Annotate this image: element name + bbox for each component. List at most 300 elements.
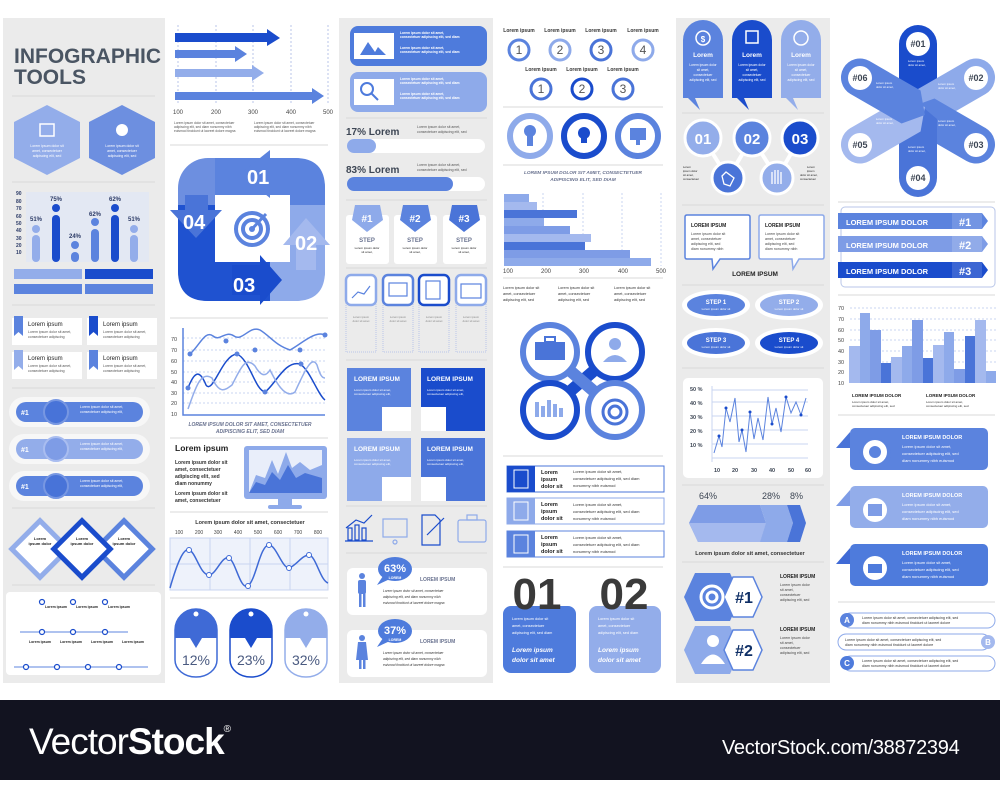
prism percentages: 8% [790,491,803,501]
ABC list: B [985,638,991,647]
monitor text block: adipiscing elit, sed [175,474,220,480]
cycle diagram: 03 [233,275,255,297]
arrow chart: Lorem ipsum dolor sit amet, consectetuer [174,121,235,125]
speech boxes: amet, consectetuer [765,237,796,241]
arrow chart: 200 [211,110,222,116]
bar chart col1: 90 [16,191,22,197]
flower diagram: Lorem ipsum [908,59,925,63]
zigzag line chart: 50 [788,468,794,474]
ABC list: diam nonummy nibh euismod tincidunt ut laoreet dolore [862,664,950,668]
hexagon cards: Lorem ipsum dolor sit [105,144,139,148]
flower diagram: Lorem ipsum [938,119,955,123]
bookmark list: Lorem ipsum [28,356,63,362]
speech boxes: adipiscing elit, sed [691,242,720,246]
timeline: Lorem ipsum [29,640,51,644]
01 02 cards: adipiscing elit, sed diam [598,631,638,635]
01 02 cards: amet, consectetuer [512,624,545,628]
list rows col4: consectetuer adipiscing elit, sed diam [573,476,640,481]
monitor text block: Lorem ipsum dolor sit [175,491,228,497]
flower diagram: Lorem ipsum [876,117,893,121]
speech tags col5: consectetuer [743,73,762,77]
pill list: consectetuer adipiscing elit, [80,410,123,414]
diamonds: ipsum dolor [71,541,94,546]
list rows col4: Lorem [541,502,558,508]
timeline: Lorem ipsum [45,605,67,609]
step cards: #2 [409,214,421,225]
bookmark list: consectetuer adipiscing [103,369,140,373]
banners col3: consectetuer adipiscing elit, sed diam [400,35,460,39]
zigzag line chart: 60 [805,468,811,474]
tab cards: diam nonummy nibh euismod [902,516,954,521]
speech boxes: diam nonummy nibh [691,247,723,251]
hexagon badges: #1 [735,590,753,607]
bookmark list: consectetuer adipiscing [103,335,140,339]
speech boxes: LOREM IPSUM [765,223,800,229]
ABC list: A [844,616,850,625]
numbered circles col4: 1 [516,43,523,57]
tab cards: LOREM IPSUM DOLOR [902,435,962,441]
ribbon list: #2 [959,240,971,252]
prism percentages: Lorem ipsum dolor sit amet, consectetuer [695,551,806,557]
speech tags col5: Lorem ipsum dolor [787,63,816,67]
column chart col6: 70 [838,306,844,312]
bar chart col1: 20 [16,243,22,249]
zigzag line chart: 40 % [690,401,703,407]
zigzag line chart: 10 [714,468,720,474]
bookmark list: Lorem ipsum dolor sit amet, [28,330,71,334]
flower diagram: #02 [968,73,984,83]
01 02 cards: Lorem ipsum [598,647,639,654]
hexagon badges: LOREM IPSUM [780,574,815,580]
icon cards: dolor sit amet [426,319,443,323]
ABC list: diam nonummy nibh euismod tincidunt ut laoreet dolore [845,643,933,647]
people percentage cards: Lorem ipsum dolor sit amet, consectetuer [383,589,444,593]
horizontal bar chart col4: 100 [503,269,514,275]
wave chart: 300 [214,530,222,536]
speech tags col5: adipiscing elit, sed [739,78,766,82]
bookmark list: consectetuer adipiscing [28,335,65,339]
speech tags col5: Lorem [791,52,811,59]
monitor text block [175,443,327,509]
pill list: consectetuer adipiscing elit, [80,484,123,488]
diamonds [12,521,152,577]
diamonds: Lorem [76,536,89,541]
ribbon list: LOREM IPSUM DOLOR [846,267,929,276]
four squares: consectetuer adipiscing elit, [354,392,391,396]
line chart col2 [171,328,328,435]
bar chart col1: 10 [16,250,22,256]
list rows col4: consectetuer adipiscing elit, sed diam [573,509,640,514]
column chart col6: 10 [838,381,844,387]
speech boxes: amet, consectetuer [691,237,722,241]
speech tags col5: sit amet, [795,68,807,72]
column chart col6: consectetuer adipiscing elit, sed [852,404,895,408]
banners col3: Lorem ipsum dolor sit amet, [400,31,444,35]
tab cards: diam nonummy nibh euismod [902,458,954,463]
hexagon cards: adipiscing elit, sed [108,154,136,158]
flower diagram [834,25,1000,197]
ribbon list: LOREM IPSUM DOLOR [846,241,929,250]
progress bars [346,125,485,191]
hexagon cards: adipiscing elit, sed [33,154,61,158]
arrow chart [173,25,334,133]
list rows col4: ipsum [541,477,557,483]
01 02 cards: 01 [513,570,561,619]
numbered circles with hands: ipsum [807,169,815,173]
footer bar: ® [224,724,232,735]
tab cards: Lorem ipsum dolor sit amet, [902,502,951,507]
footer bar: VectorStock.com/38872394 [722,737,960,759]
bookmark list: Lorem ipsum dolor sit amet, [103,330,146,334]
numbered circles col4: 2 [579,82,586,96]
line chart col2: 60 [171,359,177,365]
hexagon badges: adipiscing elit, sed [780,598,809,602]
list rows col4: dolor sit [541,516,563,522]
people percentage cards: 37% [384,625,406,637]
arrow chart: 500 [323,110,334,116]
wave chart: 800 [314,530,322,536]
zigzag line chart: 20 % [690,429,703,435]
line chart col2: 10 [171,412,177,418]
step cards: sit amet, [409,250,421,254]
ribbon list [838,207,995,287]
title: INFOGRAPHIC [14,45,161,68]
four squares: LOREM IPSUM [427,446,473,453]
hexagon badges: LOREM IPSUM [780,627,815,633]
tab cards: consectetuer adipiscing elit, sed [902,567,959,572]
percentage drops: 12% [182,652,210,668]
list rows col4: nonummy nibh euismod [573,483,615,488]
tab cards: LOREM IPSUM DOLOR [902,551,962,557]
hexagon badges: consectetuer [780,646,801,650]
percentage drops: 23% [237,652,265,668]
hexagon badges: Lorem ipsum dolor [780,583,811,587]
percentage drops: 32% [292,652,320,668]
flower diagram: Lorem ipsum [908,145,925,149]
list rows col4: nonummy nibh euismod [573,516,615,521]
bar chart col1: 30 [16,236,22,242]
tab cards: consectetuer adipiscing elit, sed [902,509,959,514]
banners col3: Lorem ipsum dolor sit amet, [400,46,444,50]
horizontal bar chart col4: Lorem ipsum dolor sit [558,286,595,290]
speech boxes: LOREM IPSUM [691,223,726,229]
ABC list: Lorem ipsum dolor sit amet, consectetuer adipiscing elit, sed [862,616,958,620]
column chart col6: Lorem ipsum dolor sit amet, [852,400,889,404]
step ellipses: STEP 3 [706,338,727,344]
column chart col6: 60 [838,328,844,334]
icon cards: Lorem ipsum [353,315,370,319]
zigzag line chart: 50 % [690,387,703,393]
icon cards: Lorem ipsum [390,315,407,319]
01 02 cards: Lorem ipsum dolor sit [512,617,549,621]
list rows col4: Lorem [541,470,558,476]
bookmark list [12,316,157,379]
people percentage cards: LOREM [389,638,401,642]
horizontal bar chart col4: amet, consectetuer [614,292,647,296]
pill list: #1 [21,484,29,491]
banners col3: consectetuer adipiscing elit, sed diam [400,81,460,85]
ABC list [838,613,995,671]
list rows col4: Lorem ipsum dolor sit amet, [573,469,622,474]
footer bar: VectorStock [29,721,224,762]
hexagon badges [684,573,815,674]
flower diagram: dolor sit amet, [908,149,926,153]
zigzag line chart [683,378,823,478]
horizontal bar chart col4: 400 [618,269,629,275]
line chart col2: 70 [171,348,177,354]
arrow chart: euismod tincidunt ut laoreet dolore magna [174,129,236,133]
numbered circles col4: Lorem ipsum [566,67,598,73]
line chart col2: ADIPISCING ELIT, SED DIAM [215,429,285,435]
speech boxes: diam nonummy nibh [765,247,797,251]
column chart col6: 70 [838,317,844,323]
numbered circles col4: Lorem ipsum [607,67,639,73]
numbered circles col4: 4 [640,43,647,57]
line chart col2: LOREM IPSUM DOLOR SIT AMET, CONSECTETUER [188,422,312,428]
panel backgrounds [3,18,830,683]
horizontal bar chart col4: 500 [656,269,667,275]
arrow chart: euismod tincidunt ut laoreet dolore magna [254,129,316,133]
wave chart: 100 [175,530,183,536]
bookmark list: Lorem ipsum [28,322,63,328]
column chart col6: Lorem ipsum dolor sit amet, [926,400,963,404]
numbered circles col4: 1 [538,82,545,96]
ABC list: Lorem ipsum dolor sit amet, consectetuer adipiscing elit, sed [845,638,941,642]
people percentage cards: adipiscing elit, sed diam nonummy nibh [383,595,441,599]
icon cards: Lorem ipsum [463,315,480,319]
progress bars: consectetuer adipiscing elit, sed [417,130,467,134]
bar chart col1: 50 [16,221,22,227]
timeline [6,592,161,675]
column chart col6: 50 [838,338,844,344]
wave chart: 600 [274,530,282,536]
flower diagram: dolor sit amet, [876,121,894,125]
list rows col4: dolor sit [541,484,563,490]
numbered circles with hands: sit amet, [683,173,694,177]
speech boxes: adipiscing elit, sed [765,242,794,246]
step ellipses: Lorem ipsum dolor sit [702,345,730,349]
speech tags col5: consectetuer [792,73,811,77]
zigzag line chart: 30 % [690,415,703,421]
progress bars: 17% Lorem [346,127,399,138]
speech tags col5: sit amet, [746,68,758,72]
column chart col6: LOREM IPSUM DOLOR [926,393,976,398]
column chart col6: 20 [838,370,844,376]
people percentage cards: LOREM [389,576,401,580]
speech tags col5: Lorem ipsum dolor [738,63,767,67]
flower diagram: #04 [910,173,926,183]
wave chart: Lorem ipsum dolor sit amet, consectetuer [195,520,306,526]
four squares: consectetuer adipiscing elit, [427,392,464,396]
list rows col4: dolor sit [541,549,563,555]
four squares: Lorem ipsum dolor sit amet, [427,388,464,392]
speech tags col5: Lorem ipsum dolor [689,63,718,67]
diamonds: ipsum dolor [29,541,52,546]
tab cards: Lorem ipsum dolor sit amet, [902,444,951,449]
timeline: Lorem ipsum [122,640,144,644]
people percentage cards: LOREM IPSUM [420,577,455,583]
ribbon list: #1 [959,217,971,229]
people percentage cards [347,557,487,677]
list rows col4: Lorem ipsum dolor sit amet, [573,535,622,540]
bar chart col1: 24% [69,234,82,240]
speech tags col5: adipiscing elit, sed [690,78,717,82]
list rows col4: consectetuer adipiscing elit, sed diam [573,542,640,547]
step ellipses: Lorem ipsum dolor sit [702,307,730,311]
column chart col6: 30 [838,360,844,366]
percentage drops [175,609,327,677]
bookmark list: Lorem ipsum dolor sit amet, [28,364,71,368]
arrow chart: 400 [286,110,297,116]
tab cards: LOREM IPSUM DOLOR [902,493,962,499]
hexagon badges: #2 [735,643,753,660]
wave chart: 500 [254,530,262,536]
icon cards: dolor sit amet [463,319,480,323]
bar chart col1: 75% [50,197,63,203]
step cards: Lorem ipsum dolor [452,246,476,250]
monitor text block: Lorem ipsum [175,443,229,453]
column chart col6 [838,306,997,408]
bar chart col1: 40 [16,228,22,234]
banners col3 [350,26,487,112]
zigzag line chart: 20 [732,468,738,474]
icon cards: dolor sit amet [390,319,407,323]
icon cards [346,275,486,352]
flower diagram: #01 [910,39,926,49]
line chart col2: 30 [171,391,177,397]
bar chart col1: 62% [109,197,122,203]
outline icons row [345,515,486,545]
horizontal bar chart col4: 300 [579,269,590,275]
icon cards: dolor sit amet [353,319,370,323]
hexagon cards [14,105,155,175]
step cards: STEP [359,238,375,244]
pill list: #1 [21,410,29,417]
bar chart col1: 70 [16,206,22,212]
flower diagram: #06 [852,73,868,83]
speech boxes [685,215,824,278]
pill list: #1 [21,447,29,454]
four squares: Lorem ipsum dolor sit amet, [427,458,464,462]
pill list: consectetuer adipiscing elit, [80,447,123,451]
01 02 cards [503,570,661,673]
ABC list: diam nonummy nibh euismod tincidunt ut laoreet dolore [862,621,950,625]
monitor text block: amet, consectetuer [175,467,221,473]
progress bars: consectetuer adipiscing elit, sed [417,168,467,172]
arrow chart: adipiscing elit, sed diam nonummy nibh [174,125,232,129]
bookmark list: consectetuer adipiscing [28,369,65,373]
hexagon cards: amet, consectetuer [32,149,63,153]
bar chart col1: 51% [30,217,43,223]
numbered circles with hands: dolor sit amet, [800,173,818,177]
flower diagram: #03 [968,140,984,150]
monitor text block: Lorem ipsum dolor sit [175,460,228,466]
cycle diagram: 04 [183,212,206,234]
title: TOOLS [14,66,86,89]
list rows col4: ipsum [541,509,557,515]
banners col3: Lorem ipsum dolor sit amet, [400,77,444,81]
hexagon badges: consectetuer [780,593,801,597]
01 02 cards: Lorem ipsum [512,647,553,654]
banners col3: consectetuer adipiscing elit, sed diam [400,96,460,100]
speech tags col5: consectetuer [694,73,713,77]
hexagon cards: Lorem ipsum dolor sit [30,144,64,148]
hexagon cards: amet, consectetuer [107,149,138,153]
bar chart col1: 51% [128,217,141,223]
horizontal bar chart col4 [503,193,667,302]
flower diagram: Lorem ipsum [938,82,955,86]
ABC list: C [844,659,850,668]
speech tags col5 [683,20,821,110]
numbered circles col4: Lorem ipsum [525,67,557,73]
ABC list: Lorem ipsum dolor sit amet, consectetuer adipiscing elit, sed [862,659,958,663]
speech tags col5: Lorem [742,52,762,59]
pill list: Lorem ipsum dolor sit amet, [80,479,123,483]
hexagon badges: adipiscing elit, sed [780,651,809,655]
banners col3: Lorem ipsum dolor sit amet, [400,92,444,96]
step cards [346,205,486,264]
numbered circles with hands [683,120,818,194]
numbered circles with hands: 01 [695,131,711,148]
flower diagram: dolor sit amet, [876,85,894,89]
wave chart: 700 [294,530,302,536]
numbered circles col4: Lorem ipsum [544,28,576,34]
flower diagram: dolor sit amet, [938,123,956,127]
numbered circles with hands: consectetuer [800,177,816,181]
timeline: Lorem ipsum [76,605,98,609]
line chart col2: 70 [171,337,177,343]
title [14,45,161,89]
bookmark list: Lorem ipsum dolor sit amet, [103,364,146,368]
step cards: STEP [407,238,423,244]
progress bars: Lorem ipsum dolor sit amet, [417,125,460,129]
numbered circles col4 [503,28,659,99]
bar chart col1: 62% [89,212,102,218]
hexagon badges: Lorem ipsum dolor [780,636,811,640]
numbered circles col4: Lorem ipsum [503,28,535,34]
arrow chart: adipiscing elit, sed diam nonummy nibh [254,125,312,129]
numbered circles with hands: 03 [792,131,808,148]
hexagon badges: sit amet, [780,641,794,645]
four squares: Lorem ipsum dolor sit amet, [354,458,391,462]
wave chart: 400 [234,530,242,536]
step ellipses: STEP 2 [779,300,800,306]
step cards: #1 [361,214,373,225]
line chart col2: 20 [171,401,177,407]
four squares: consectetuer adipiscing elit, [354,462,391,466]
pill list: Lorem ipsum dolor sit amet, [80,442,123,446]
step ellipses [682,290,823,358]
monitor text block: amet, consectetuer [175,498,221,504]
line chart col2: 40 [171,380,177,386]
numbered circles with hands: 02 [744,131,760,148]
bar chart col1 [14,191,153,294]
step ellipses: STEP 4 [779,338,800,344]
speech tags col5: adipiscing elit, sed [788,78,815,82]
horizontal bar chart col4: adipiscing elit, sed [558,298,589,302]
timeline: Lorem ipsum [108,605,130,609]
tab cards: consectetuer adipiscing elit, sed [902,451,959,456]
horizontal bar chart col4: adipiscing elit, sed [614,298,645,302]
banners col3: consectetuer adipiscing elit, sed diam [400,50,460,54]
list rows col4: Lorem [541,535,558,541]
numbered circles col4: Lorem ipsum [585,28,617,34]
list rows col4: Lorem ipsum dolor sit amet, [573,502,622,507]
list rows col4: nonummy nibh euismod [573,549,615,554]
01 02 cards: dolor sit amet [598,657,641,664]
arrow chart: 300 [248,110,259,116]
cycle diagram: 01 [247,167,269,189]
